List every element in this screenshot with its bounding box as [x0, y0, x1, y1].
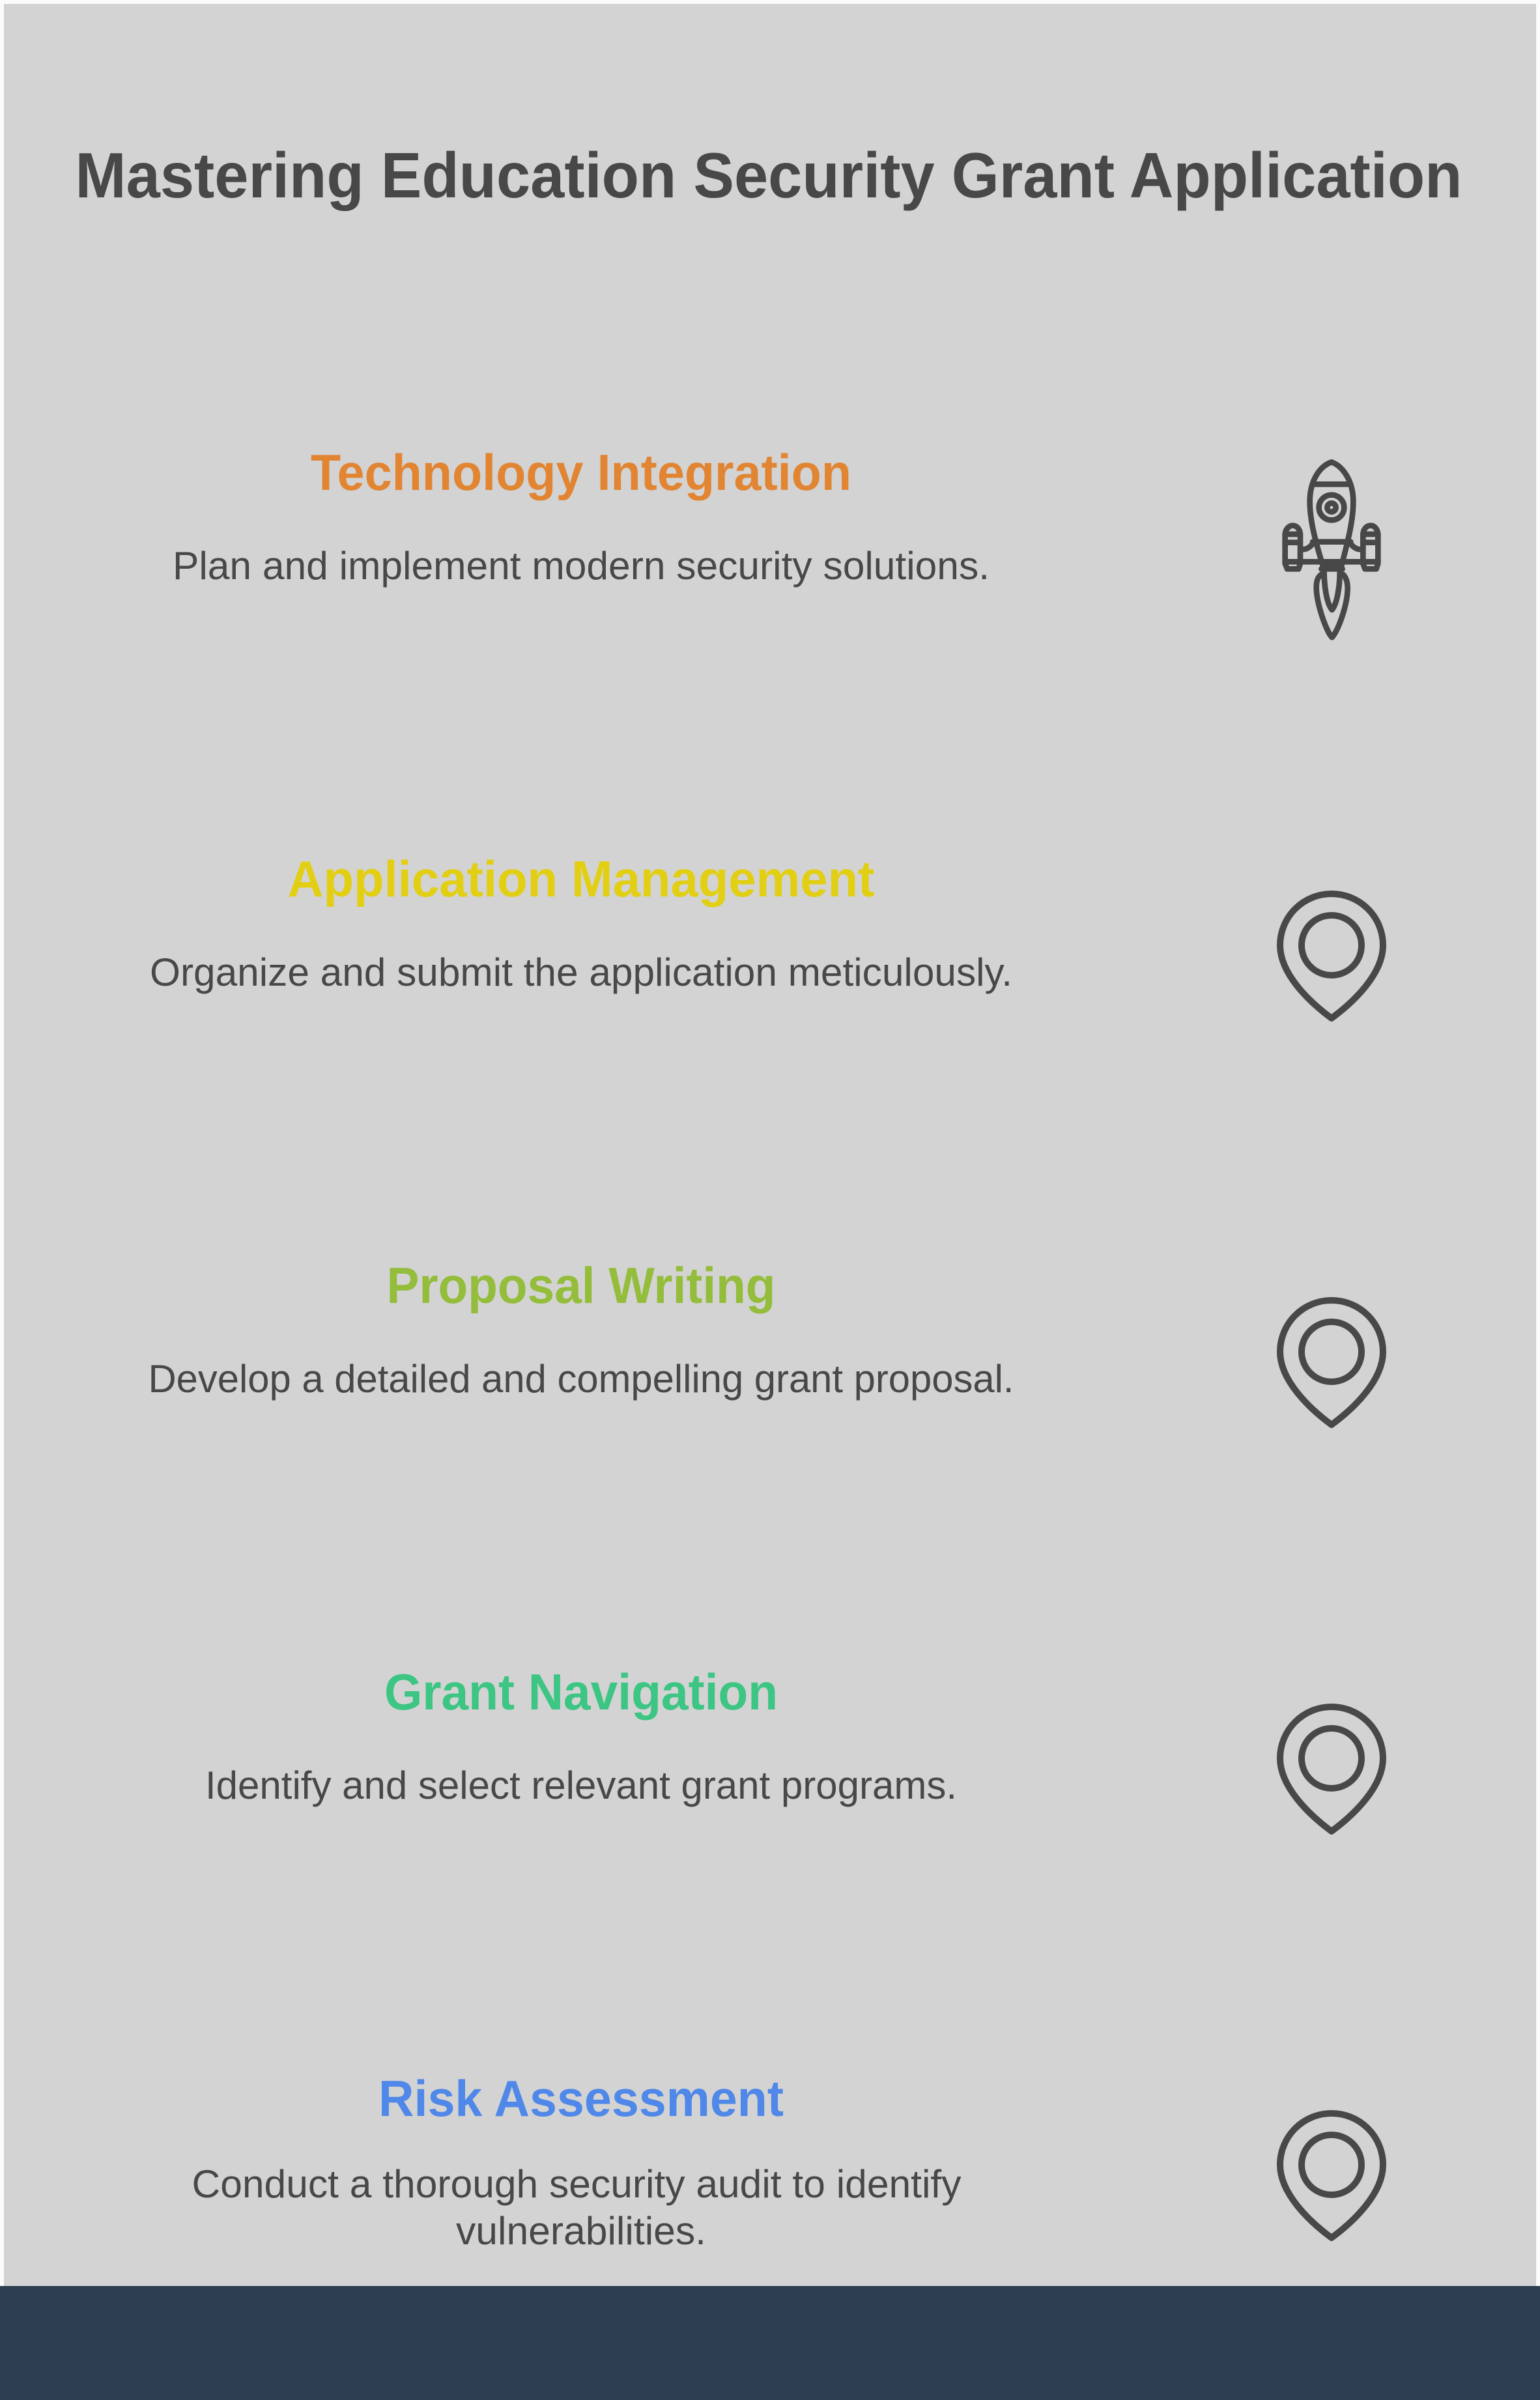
icon: location pin	[1280, 2113, 1383, 2238]
icon: rocket	[1285, 462, 1378, 637]
heading: Application Management: Application Management	[288, 850, 875, 907]
description: Risk Assessment: Conduct a thorough security audit to identify	[192, 2162, 962, 2206]
footer band	[0, 2286, 1540, 2400]
icon: location pin	[1280, 894, 1383, 1018]
title: Mastering Education Security Grant Application	[76, 139, 1462, 211]
description: Risk Assessment: vulnerabilities.	[456, 2209, 706, 2253]
icon: location pin	[1280, 1300, 1383, 1425]
description: Risk Assessment	[192, 2162, 962, 2253]
heading: Proposal Writing: Proposal Writing	[387, 1257, 775, 1314]
description: Application Management: Organize and submit the application meticulously.	[150, 950, 1012, 994]
panel: Proposal Writing row	[149, 1257, 1383, 1425]
panel: Risk Assessment row	[192, 2070, 1383, 2253]
panel: Grant Navigation row	[205, 1663, 1383, 1831]
heading: Technology Integration: Technology Integration	[311, 444, 851, 501]
panel: Technology Integration row	[173, 444, 1378, 637]
icon: location pin	[1280, 1707, 1383, 1831]
panel: Application Management row	[150, 850, 1383, 1018]
description: Grant Navigation: Identify and select relevant grant programs.	[205, 1764, 957, 1807]
heading: Grant Navigation: Grant Navigation	[384, 1663, 778, 1721]
heading: Risk Assessment: Risk Assessment	[378, 2070, 784, 2127]
description: Technology Integration: Plan and implement modern security solutions.	[173, 544, 990, 588]
description: Proposal Writing: Develop a detailed and compelling grant proposal.	[149, 1357, 1014, 1401]
